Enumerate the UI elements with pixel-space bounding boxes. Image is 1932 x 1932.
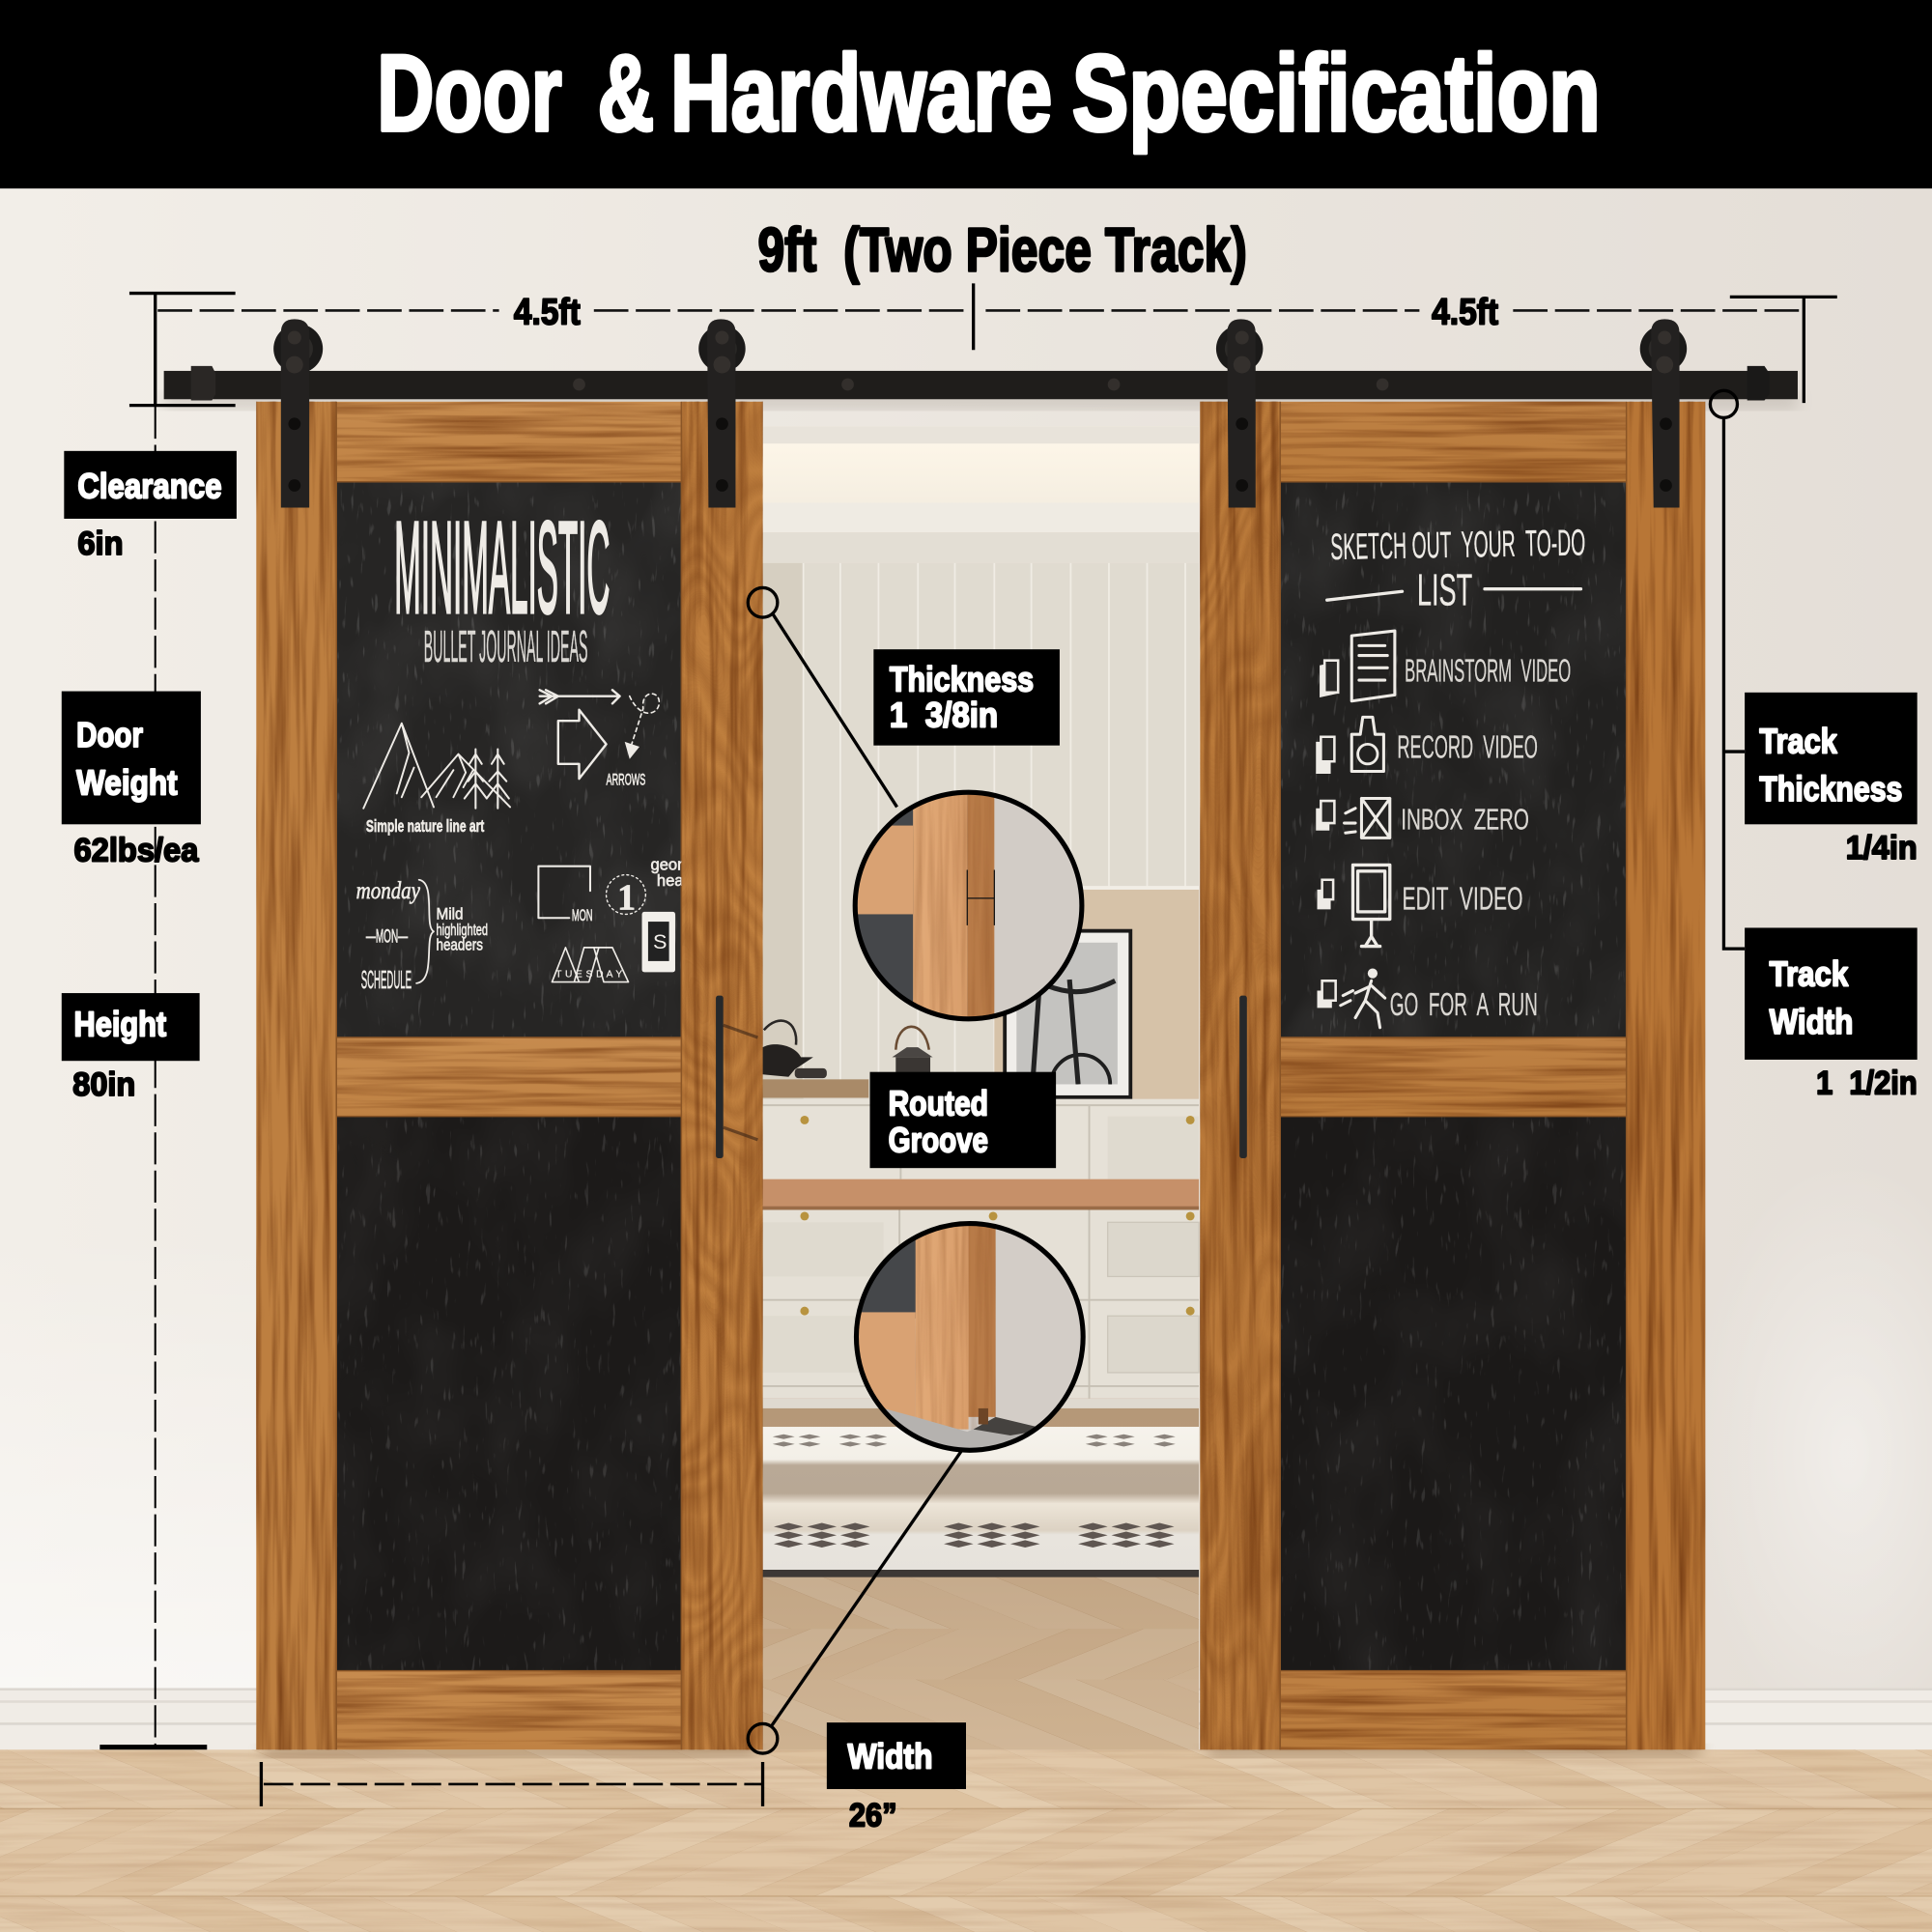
- label: track thickness: Thickness: [1759, 770, 1902, 809]
- paneled wall: [763, 563, 1199, 1100]
- label: height: Height: [74, 1006, 166, 1044]
- arrowhead: [625, 742, 639, 759]
- numbered circle: [607, 875, 645, 918]
- door handle: [1239, 996, 1247, 1158]
- left half length label: 4.5ft: [514, 291, 581, 332]
- label: track width: [1745, 927, 1918, 1060]
- label: track width: Track: [1770, 954, 1848, 993]
- inbox row: [1316, 799, 1529, 838]
- label: thickness: 1 3/8in: [890, 696, 998, 735]
- chalk art: minimalistic bullet journal: MON: [572, 906, 593, 924]
- dimension: door height: [99, 407, 207, 1749]
- leader line: thickness: [748, 587, 897, 807]
- label: clearance: [64, 451, 237, 519]
- left stopper: [191, 366, 215, 401]
- s badge: S: [653, 929, 667, 953]
- label: clearance: Clearance: [77, 467, 222, 505]
- chalk art: minimalistic bullet journal: headers: [437, 935, 483, 953]
- barn door track: [164, 366, 1798, 401]
- hanger 1: [273, 319, 323, 508]
- brace: [416, 880, 434, 983]
- hall floor: [763, 1399, 1199, 1749]
- framed bicycle print: [1003, 929, 1132, 1114]
- title: &: [598, 32, 654, 154]
- lower cabinets: [763, 1210, 1199, 1399]
- chalk art: minimalistic bullet journal: [356, 520, 682, 989]
- wall lower glow: [0, 1233, 256, 1749]
- label: routed groove: [870, 1072, 1056, 1168]
- track shadow on wall: [164, 392, 1798, 409]
- label: track width: Width: [1770, 1003, 1853, 1041]
- leader line: width and groove: [748, 1452, 961, 1753]
- chalk art: to-do list: [1316, 522, 1586, 1028]
- title: Hardware: [670, 32, 1052, 154]
- label: door weight: Weight: [76, 764, 178, 803]
- hanger 4: [1640, 319, 1687, 508]
- right stopper: [1747, 366, 1770, 401]
- dashed loop: [630, 694, 659, 747]
- value: clearance: 6in: [77, 526, 124, 562]
- run row: GO FOR A RUN: [1390, 987, 1538, 1023]
- label: track thickness: [1745, 693, 1918, 824]
- geometric heading note: geome: [650, 856, 699, 874]
- edit row: [1318, 865, 1523, 947]
- brainstorm row: [1320, 631, 1571, 701]
- upper chalkboard: [336, 482, 681, 1037]
- leader line: track: [1710, 390, 1745, 949]
- text: MINIMALISTIC: [394, 495, 610, 640]
- middle rail: [336, 1037, 681, 1117]
- run row: [1318, 969, 1538, 1028]
- list subheading: LIST: [1417, 564, 1472, 614]
- numbered circle: 1: [617, 877, 636, 918]
- wall sunlight patch: [1688, 1158, 1932, 1749]
- value: track width: 1 1/2in: [1816, 1065, 1918, 1102]
- label: width: [827, 1722, 966, 1789]
- tuesday banner: T U E S D A Y: [555, 969, 622, 980]
- top rail: [336, 402, 681, 482]
- pine trees: [465, 750, 509, 809]
- label: routed groove: Routed: [889, 1084, 988, 1122]
- label: door weight: [62, 692, 201, 824]
- lower chalkboard: [336, 1117, 681, 1671]
- kettle center: [892, 1027, 933, 1082]
- middle rail: [1280, 1037, 1627, 1117]
- s badge: [642, 912, 675, 972]
- door handle: [716, 996, 757, 1158]
- magnifier: routed groove detail: [850, 1220, 1096, 1454]
- title: [377, 32, 1601, 154]
- bottom rail: [336, 1671, 681, 1749]
- label: thickness: [873, 649, 1060, 746]
- arrow sketch: [540, 690, 620, 779]
- backsplash: [994, 890, 1199, 1099]
- hanger 2: [698, 319, 746, 508]
- track bolts: [573, 379, 1389, 390]
- right stile: [1627, 402, 1705, 1749]
- title: Specification: [1072, 32, 1601, 154]
- lower chalkboard: [1280, 1117, 1627, 1671]
- record row: RECORD VIDEO: [1397, 729, 1538, 765]
- right barn door: [1200, 402, 1705, 1757]
- value: track thickness: 1/4in: [1846, 830, 1918, 867]
- inbox row: INBOX ZERO: [1401, 803, 1529, 836]
- baseboard: [0, 1688, 1932, 1749]
- label: height: [62, 993, 200, 1061]
- left barn door: [256, 402, 763, 1757]
- kettle left: [763, 1021, 827, 1078]
- mon header: —MON—: [366, 927, 409, 948]
- bottom rail: [1280, 1671, 1627, 1749]
- label: routed groove: Groove: [889, 1122, 988, 1160]
- tuesday banner: [552, 948, 629, 982]
- highlighted headers note: Mild: [437, 905, 464, 923]
- upper cabinets: [763, 1099, 1199, 1179]
- brainstorm row: BRAINSTORM VIDEO: [1405, 653, 1571, 689]
- value: height: 80in: [72, 1066, 135, 1103]
- title: Door: [377, 32, 562, 154]
- mon box: [538, 867, 590, 918]
- dimension: track span: [129, 283, 1837, 406]
- upper chalkboard: [1280, 482, 1627, 1037]
- value: door weight: 62lbs/ea: [74, 833, 199, 869]
- dimension: door width: [261, 1762, 763, 1806]
- right half length label: 4.5ft: [1432, 291, 1498, 332]
- label: width: Width: [848, 1737, 933, 1776]
- interior opening scene: [763, 426, 1199, 1749]
- rug: [763, 1427, 1199, 1577]
- right stile: [681, 402, 763, 1749]
- chalk art: minimalistic bullet journal: highlighted: [437, 921, 488, 939]
- label: thickness: Thickness: [890, 661, 1034, 699]
- edit row: EDIT VIDEO: [1403, 881, 1523, 917]
- label: track thickness: Track: [1759, 722, 1837, 760]
- floor: [0, 1749, 1932, 1932]
- door shadow: [1208, 1745, 1700, 1757]
- magnifier: thickness detail: [850, 788, 1096, 1023]
- chalk art: minimalistic bullet journal: head: [657, 871, 693, 890]
- wooden counter: [763, 1179, 1199, 1210]
- hanger 3: [1216, 319, 1263, 508]
- left stile: [1200, 402, 1280, 1749]
- arrows caption: ARROWS: [607, 770, 645, 788]
- chalk art: minimalistic bullet journal: SCHEDULE: [361, 967, 412, 994]
- nature caption: Simple nature line art: [366, 816, 484, 836]
- to-do heading: SKETCH OUT YOUR TO-DO: [1330, 522, 1586, 568]
- value: width: 26”: [849, 1797, 897, 1833]
- mountains sketch: [363, 724, 510, 809]
- left stile: [256, 402, 336, 1749]
- track overall length label: 9ft (Two Piece Track): [757, 215, 1247, 285]
- monday header: monday: [356, 876, 421, 904]
- wood board on counter: [763, 1079, 868, 1097]
- label: door weight: Door: [76, 716, 143, 754]
- door shadow: [264, 1745, 756, 1757]
- chalk art: minimalistic bullet journal: BULLET JOURNAL IDEAS: [424, 621, 587, 671]
- top rail: [1280, 402, 1627, 482]
- record row: [1316, 717, 1538, 774]
- header bar: [0, 0, 1932, 188]
